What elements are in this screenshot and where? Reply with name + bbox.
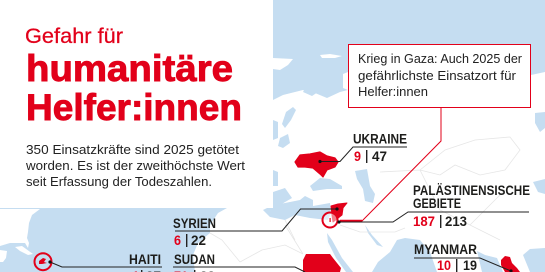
title: Gefahr für [25,25,123,48]
label: Sudan [173,252,305,272]
label: Palästinensische Gebiete [337,183,530,229]
intro text: 350 Einsatzkräfte sind 2025 getötet [26,142,239,157]
label: Ukraine: 47 [372,149,387,164]
label: Ukraine [318,132,407,164]
label: Myanmar [414,242,513,272]
label: Syrien [173,207,339,248]
label: Syrien: 6 [174,233,181,248]
callout: Gaza: Helfer:innen [358,85,428,99]
label: Sudan: SUDAN [174,252,215,267]
label and marker: Haiti [34,252,162,272]
highlighted region: Syria [331,203,347,222]
title: humanitäre [26,47,233,89]
intro text: worden. Es ist der zweithöchste Wert [25,158,245,173]
callout: Gaza [348,44,530,108]
callout: Gaza: gefährlichste Einsatzort für [358,69,516,83]
Gaza marker and callout line [322,107,441,228]
highlighted region: Myanmar [501,256,520,272]
label and marker: Haiti: HAITI [129,252,161,267]
label: Ukraine: 9 [354,149,361,164]
label: Palästinensische Gebiete: PALÄSTINENSISCHE [413,183,530,198]
title [25,25,242,128]
label: Palästinensische Gebiete: 213 [445,214,467,229]
label: Myanmar: MYANMAR [414,242,477,257]
white text panel [0,0,273,208]
label: Syrien: SYRIEN [173,216,216,231]
intro text: seit Erfassung der Todeszahlen. [26,174,212,189]
label: Palästinensische Gebiete: 187 [413,214,435,229]
title: Helfer:innen [26,86,242,128]
label: Syrien: 22 [191,233,206,248]
intro text [25,142,245,189]
highlighted region: Sudan [303,254,341,272]
highlighted region: Ukraine [295,152,338,177]
label: Palästinensische Gebiete: GEBIETE [413,196,461,211]
label: Ukraine: UKRAINE [353,132,407,146]
callout: Gaza: Krieg in Gaza: Auch 2025 der [358,52,522,66]
